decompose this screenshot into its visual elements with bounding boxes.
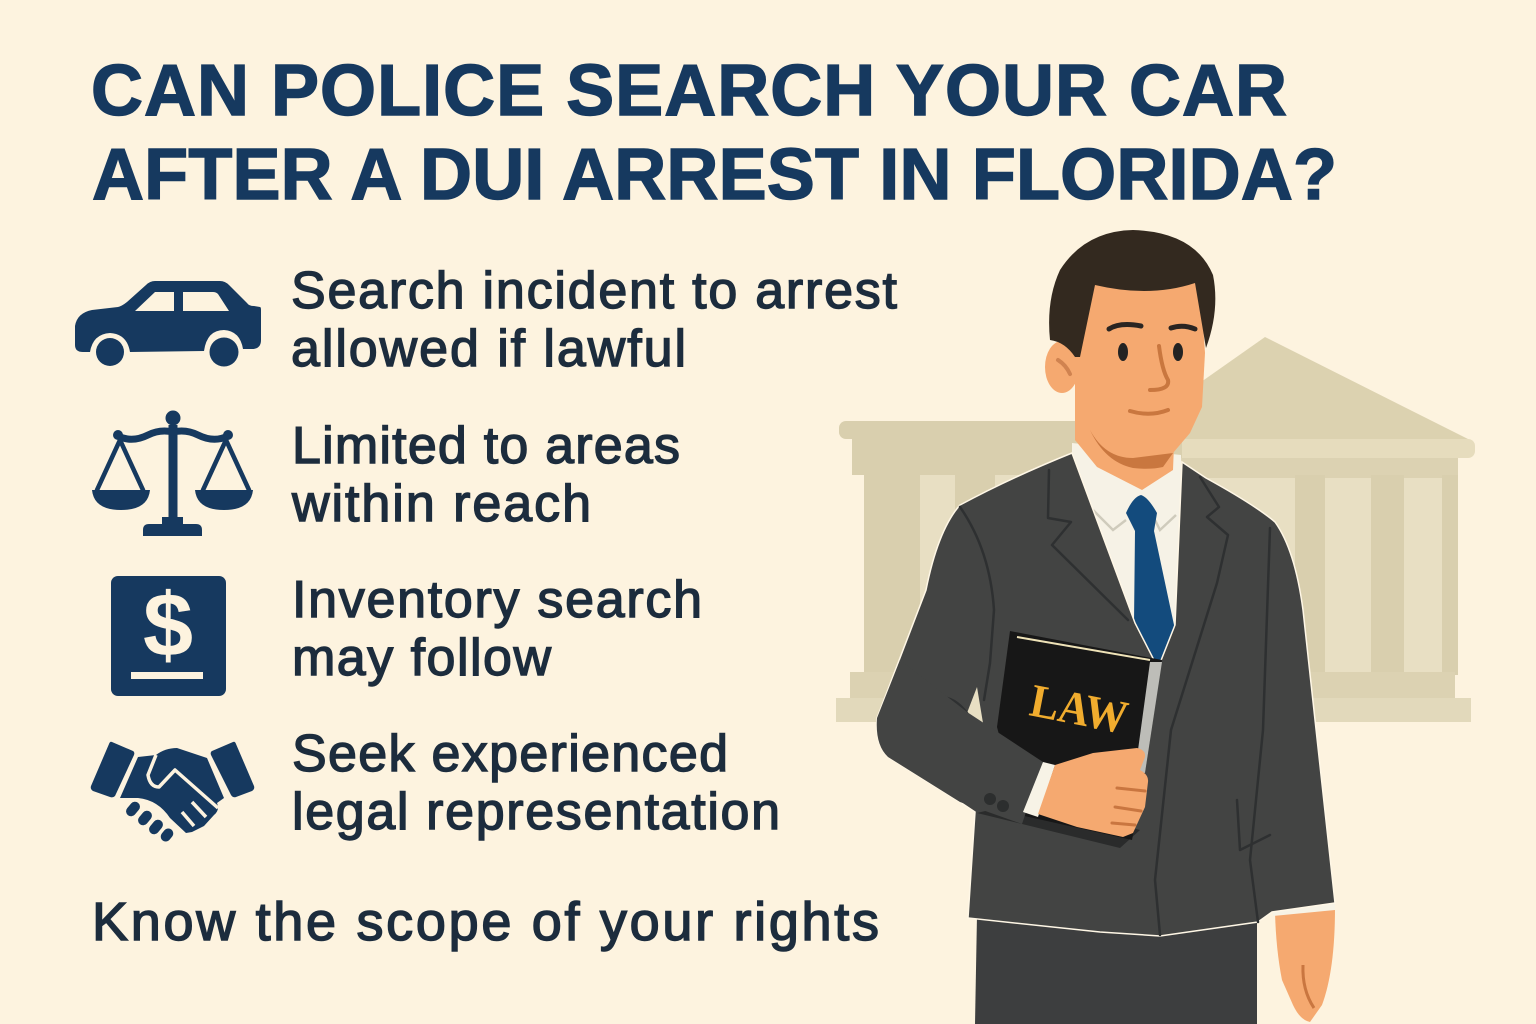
- icon: dollar document: [111, 576, 226, 696]
- jaw shadow: [1090, 430, 1173, 469]
- mouth: [1130, 410, 1168, 414]
- trousers: [975, 915, 1257, 1024]
- law book: [997, 631, 1162, 840]
- tie: [1126, 495, 1174, 668]
- suit jacket: [877, 453, 1335, 936]
- neck: [1075, 420, 1175, 490]
- face: [1075, 280, 1205, 458]
- shadow under book: [977, 800, 1140, 848]
- jacket seams: [925, 470, 1270, 935]
- eyebrows: [1109, 325, 1195, 329]
- text: search incident: allowed if lawful: [291, 320, 686, 378]
- text: seek representation: legal representation: [292, 783, 780, 841]
- left forearm sleeve: [877, 660, 1043, 824]
- text: limited to areas: within reach: [291, 475, 591, 533]
- icon: car: [75, 281, 261, 366]
- title: [91, 51, 1337, 215]
- lawyer figure: [877, 230, 1335, 1024]
- title: CAN POLICE SEARCH YOUR CAR: [91, 51, 1287, 131]
- gap between arm and torso: [967, 687, 983, 723]
- icon: handshake: [91, 742, 254, 844]
- text: seek representation: [292, 725, 780, 841]
- closing line: Know the scope of your rights: [92, 892, 879, 952]
- ear: [1045, 341, 1079, 393]
- text: inventory search: may follow: [292, 629, 551, 687]
- courthouse background: [836, 337, 1475, 722]
- hand holding book: [1038, 748, 1148, 837]
- text: limited to areas: Limited to areas: [292, 417, 680, 475]
- icon: scales of justice: [92, 410, 253, 536]
- hair: [1049, 230, 1215, 357]
- right hand: [1275, 908, 1335, 1022]
- text: search incident: Search incident to arrest: [291, 262, 898, 320]
- text: seek representation: Seek experienced: [292, 725, 728, 783]
- text: inventory search: [292, 571, 702, 687]
- title: AFTER A DUI ARREST IN FLORIDA?: [92, 135, 1337, 215]
- cuff buttons: [984, 793, 1009, 812]
- nose: [1150, 346, 1168, 390]
- law book: LAW: [1026, 675, 1132, 744]
- text: inventory search: Inventory search: [292, 571, 702, 629]
- eyes: [1118, 343, 1183, 361]
- text: search incident: [291, 262, 898, 378]
- text: limited to areas: [291, 417, 680, 533]
- shirt cuff: [1272, 902, 1335, 916]
- icon: dollar document: $: [143, 576, 193, 676]
- collar shadow: [1088, 505, 1176, 530]
- neck and shirt: [1072, 443, 1184, 640]
- shirt cuff left: [1023, 762, 1055, 817]
